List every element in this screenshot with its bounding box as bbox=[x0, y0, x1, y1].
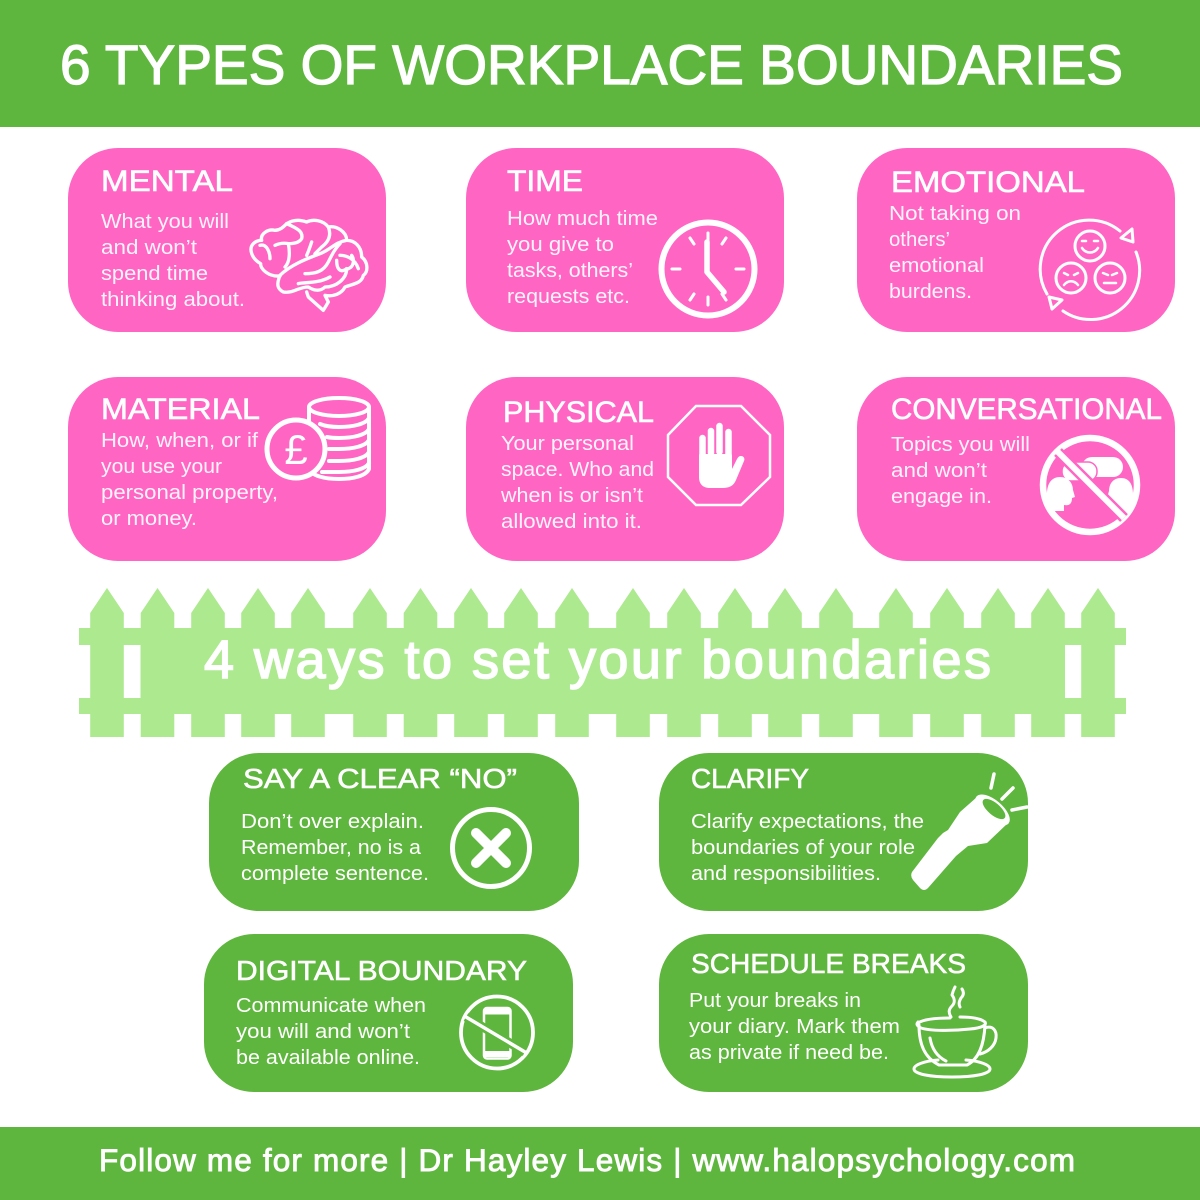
panel: time: you give to bbox=[507, 233, 614, 256]
panel: digital boundary: DIGITAL BOUNDARY bbox=[236, 955, 527, 986]
icon: emotions cycle bbox=[1040, 220, 1140, 320]
panel: physical: PHYSICAL bbox=[503, 396, 654, 429]
panel: digital boundary: you will and won’t bbox=[236, 1020, 410, 1043]
panel: clarify: and responsibilities. bbox=[691, 862, 881, 885]
panel: physical: when is or isn’t bbox=[500, 484, 643, 507]
panel: say a clear no: complete sentence. bbox=[241, 862, 429, 885]
panel: digital boundary bbox=[204, 934, 573, 1092]
panel: time: requests etc. bbox=[507, 285, 630, 308]
panel: mental: spend time bbox=[101, 262, 208, 285]
panel: digital boundary: Communicate when bbox=[236, 994, 426, 1017]
header band bbox=[0, 0, 1200, 127]
icon: coins: £ bbox=[284, 426, 308, 473]
panel: clarify: Clarify expectations, the bbox=[691, 810, 924, 833]
panel: time: tasks, others’ bbox=[507, 259, 633, 282]
panel: physical: Your personal bbox=[501, 432, 634, 455]
panel: schedule breaks: as private if need be. bbox=[689, 1041, 889, 1064]
panel: digital boundary: be available online. bbox=[236, 1046, 420, 1069]
panel: schedule breaks: your diary. Mark them bbox=[689, 1015, 900, 1038]
panel: conversational: CONVERSATIONAL bbox=[891, 393, 1162, 426]
panel: clarify bbox=[659, 753, 1028, 911]
panel: schedule breaks: SCHEDULE BREAKS bbox=[691, 948, 966, 979]
fence banner bbox=[79, 588, 1126, 737]
footer band bbox=[0, 1127, 1200, 1200]
panel: say a clear no: Remember, no is a bbox=[241, 836, 422, 859]
icon: cross in circle bbox=[452, 810, 530, 886]
panel: mental: MENTAL bbox=[101, 165, 233, 198]
panel: say a clear no: Don’t over explain. bbox=[241, 810, 424, 833]
panel: say a clear no bbox=[209, 753, 579, 911]
panel: time bbox=[466, 148, 784, 332]
icon: no phone bbox=[461, 996, 533, 1068]
icon: torch bbox=[911, 774, 1027, 890]
panel: physical: allowed into it. bbox=[501, 510, 642, 533]
panel: mental bbox=[68, 148, 386, 332]
icon: clock bbox=[662, 222, 754, 316]
footer text: Follow me for more | Dr Hayley Lewis | www.halopsychology.com bbox=[99, 1142, 1075, 1178]
panel: conversational: engage in. bbox=[891, 485, 992, 508]
panel: emotional bbox=[857, 148, 1175, 332]
panel: material: How, when, or if bbox=[101, 429, 258, 452]
panel: emotional: Not taking on bbox=[889, 202, 1021, 225]
panel: emotional: emotional bbox=[889, 254, 984, 277]
panel: material: you use your bbox=[101, 455, 222, 478]
panel: conversational: and won’t bbox=[891, 459, 987, 482]
panel: mental: thinking about. bbox=[101, 288, 245, 311]
panel: material: or money. bbox=[101, 507, 197, 530]
panel: clarify: CLARIFY bbox=[691, 763, 809, 794]
panel: time: TIME bbox=[507, 165, 583, 198]
fence heading: 4 ways to set your boundaries bbox=[204, 630, 991, 690]
title: 6 TYPES OF WORKPLACE BOUNDARIES bbox=[60, 33, 1123, 96]
panel: physical bbox=[466, 377, 784, 561]
icon: brain bbox=[251, 220, 367, 310]
panel: schedule breaks: Put your breaks in bbox=[689, 989, 861, 1012]
panel: material bbox=[68, 377, 386, 561]
panel: conversational bbox=[857, 377, 1175, 561]
panel: conversational: Topics you will bbox=[891, 433, 1030, 456]
icon: coins bbox=[267, 398, 369, 479]
icon: tea cup bbox=[914, 987, 996, 1077]
panel: time: How much time bbox=[507, 207, 658, 230]
panel: emotional: others’ bbox=[889, 228, 950, 251]
panel: schedule breaks bbox=[659, 934, 1028, 1092]
panel: material: MATERIAL bbox=[101, 393, 260, 426]
panel: mental: and won’t bbox=[101, 236, 197, 259]
icon: stop hand bbox=[668, 406, 770, 505]
panel: emotional: burdens. bbox=[889, 280, 972, 303]
panel: physical: space. Who and bbox=[501, 458, 654, 481]
panel: clarify: boundaries of your role bbox=[691, 836, 915, 859]
panel: mental: What you will bbox=[101, 210, 229, 233]
panel: emotional: EMOTIONAL bbox=[891, 166, 1085, 199]
fence pickets bbox=[79, 588, 1126, 737]
icon: no conversation bbox=[1043, 438, 1137, 532]
panel: say a clear no: SAY A CLEAR “NO” bbox=[243, 763, 517, 794]
panel: material: personal property, bbox=[101, 481, 278, 504]
